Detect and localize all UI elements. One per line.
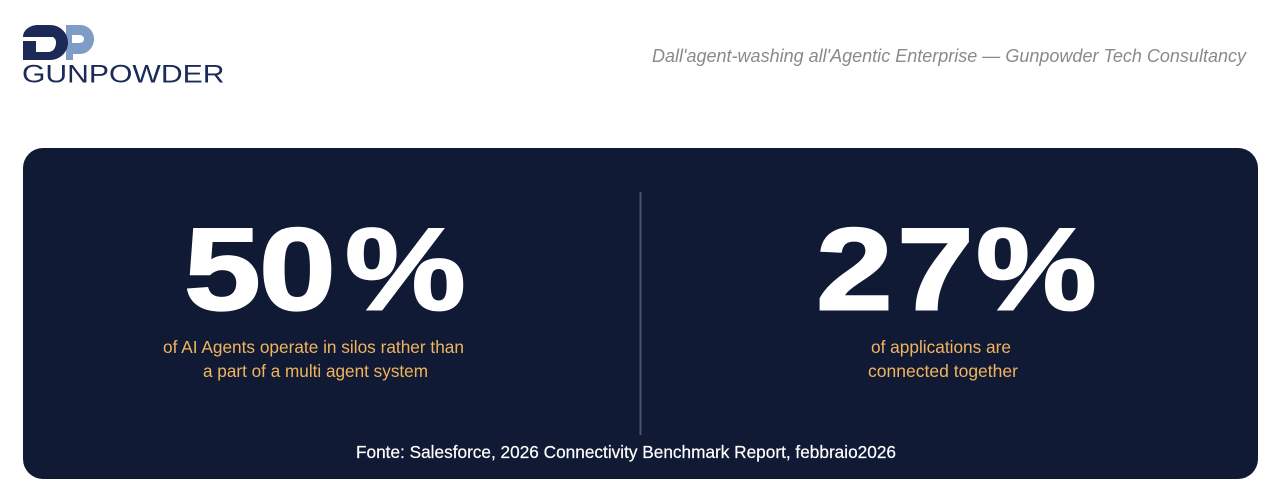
statistic: 50% xyxy=(163,203,466,381)
caption: AI agents in silos xyxy=(163,337,464,381)
big number 27%: % xyxy=(976,203,1097,334)
big number 50%: 0 xyxy=(259,204,336,335)
caption: connected applications: connected together xyxy=(868,361,1018,381)
caption: connected applications: of applications are xyxy=(871,337,1011,357)
panel: statistics xyxy=(23,148,1258,479)
source note: Fonte: Salesforce, 2026 Connectivity Benchmark Report, febbraio2026 xyxy=(356,442,896,462)
header subtitle: Dall'agent-washing all'Agentic Enterprise — Gunpowder Tech Consultancy xyxy=(652,45,1248,66)
panel background xyxy=(23,148,1258,479)
big number 27%: 2 xyxy=(816,204,893,335)
big number 50%: % xyxy=(345,203,466,334)
big number 50% xyxy=(184,203,466,335)
statistic: 27% xyxy=(816,203,1097,381)
caption: AI agents in silos: a part of a multi agent system xyxy=(203,361,428,381)
caption: connected applications xyxy=(868,337,1018,381)
big number 27% xyxy=(816,203,1097,335)
big number 27%: 7 xyxy=(897,204,974,335)
column divider xyxy=(640,192,642,435)
logo: Gunpowder xyxy=(22,25,224,88)
icon: P monogram xyxy=(58,25,94,60)
caption: AI agents in silos: of AI Agents operate in silos rather than xyxy=(163,337,464,357)
logo wordmark: GUNPOWDER xyxy=(22,60,224,88)
big number 50%: 5 xyxy=(184,204,261,335)
icon: G monogram xyxy=(23,25,68,60)
